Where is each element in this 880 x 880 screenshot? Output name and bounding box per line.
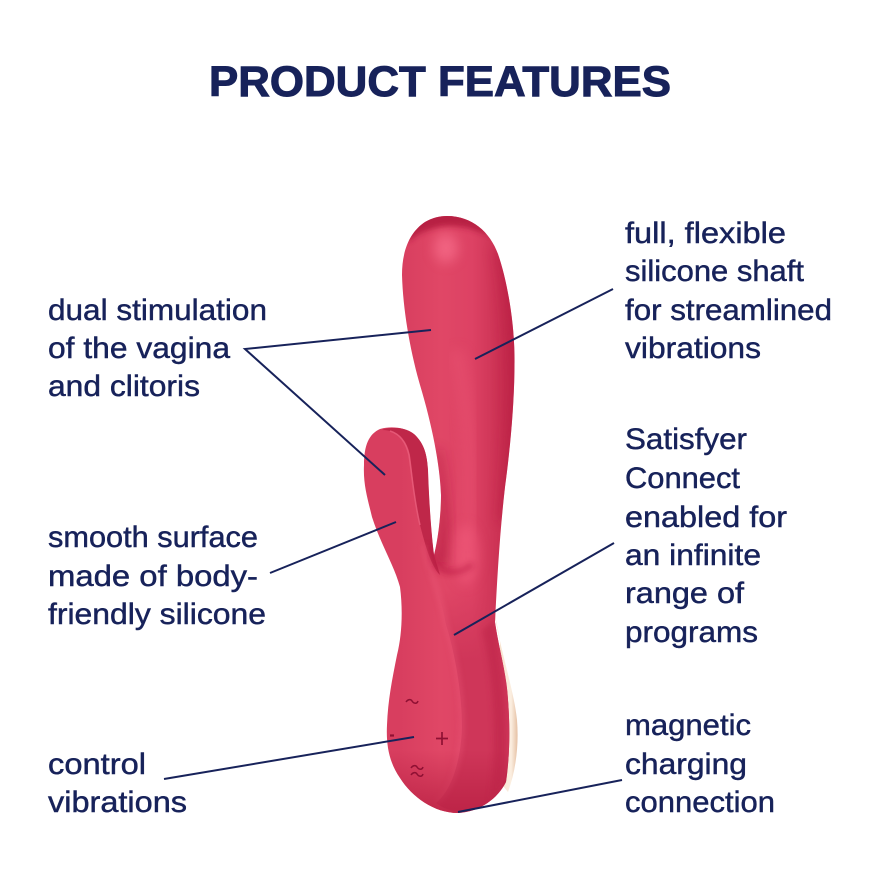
- arm edge highlight: [390, 431, 420, 525]
- line: Satisfyer Connect: [454, 543, 614, 635]
- text: dual stimulation: [48, 294, 267, 403]
- text: Satisfyer Connect: Satisfyer: [625, 423, 747, 456]
- icon: minus: [390, 734, 394, 737]
- text: Satisfyer Connect: an infinite: [625, 539, 761, 572]
- inner shaft shadow: [434, 450, 449, 566]
- text: flexible shaft: [625, 217, 832, 365]
- text: flexible shaft: for streamlined: [625, 294, 832, 327]
- text: dual stimulation: dual stimulation: [48, 294, 267, 327]
- leader lines: [164, 289, 622, 812]
- foot shade: [391, 760, 508, 813]
- product shading: [380, 210, 520, 820]
- ridge edge: [452, 644, 462, 756]
- text: flexible shaft: silicone shaft: [625, 255, 804, 288]
- shaft long highlight: [456, 350, 470, 540]
- body ridge: [449, 614, 510, 811]
- line: smooth surface: [270, 522, 396, 573]
- text: magnetic charging: charging: [625, 748, 747, 781]
- text: flexible shaft: vibrations: [625, 332, 761, 365]
- text: smooth surface: smooth surface: [48, 521, 258, 554]
- charging strip: [494, 610, 518, 792]
- shaft right shadow: [496, 250, 514, 520]
- crotch highlight: [454, 525, 478, 585]
- text: flexible shaft: full, flexible: [625, 217, 786, 250]
- tip highlight: [434, 233, 458, 263]
- text: Satisfyer Connect: enabled for: [625, 501, 787, 534]
- icon: plus: [436, 732, 448, 745]
- shaft tip shade: [408, 216, 488, 242]
- icon: wave: [406, 700, 418, 703]
- text: control vibrations: vibrations: [48, 786, 187, 819]
- text: Satisfyer Connect: range of: [625, 577, 745, 610]
- icon: double wave: [411, 766, 423, 776]
- text: Satisfyer Connect: programs: [625, 616, 758, 649]
- text: smooth surface: [48, 521, 266, 631]
- text: magnetic charging: [625, 709, 775, 819]
- text: smooth surface: friendly silicone: [48, 598, 266, 631]
- text: smooth surface: made of body-: [48, 560, 258, 593]
- control icons: [390, 700, 448, 776]
- line: shaft: [475, 289, 613, 359]
- line: control vibrations: [164, 737, 414, 779]
- text: magnetic charging: connection: [625, 786, 775, 819]
- product illustration: [364, 210, 520, 820]
- text: dual stimulation: and clitoris: [48, 370, 200, 403]
- line: dual stimulation: [245, 330, 431, 475]
- right body shade: [484, 623, 508, 784]
- title: PRODUCT FEATURES: [209, 58, 671, 106]
- text: Satisfyer Connect: Connect: [625, 462, 740, 495]
- arm side panel: [382, 428, 440, 575]
- text: magnetic charging: magnetic: [625, 709, 751, 742]
- text: dual stimulation: of the vagina: [48, 332, 231, 365]
- text: control vibrations: [48, 748, 187, 819]
- line: magnetic charging: [458, 780, 622, 812]
- gap shadow: [430, 545, 472, 572]
- text: Satisfyer Connect: [625, 423, 787, 649]
- product silhouette: [364, 216, 515, 813]
- text: control vibrations: control: [48, 748, 146, 781]
